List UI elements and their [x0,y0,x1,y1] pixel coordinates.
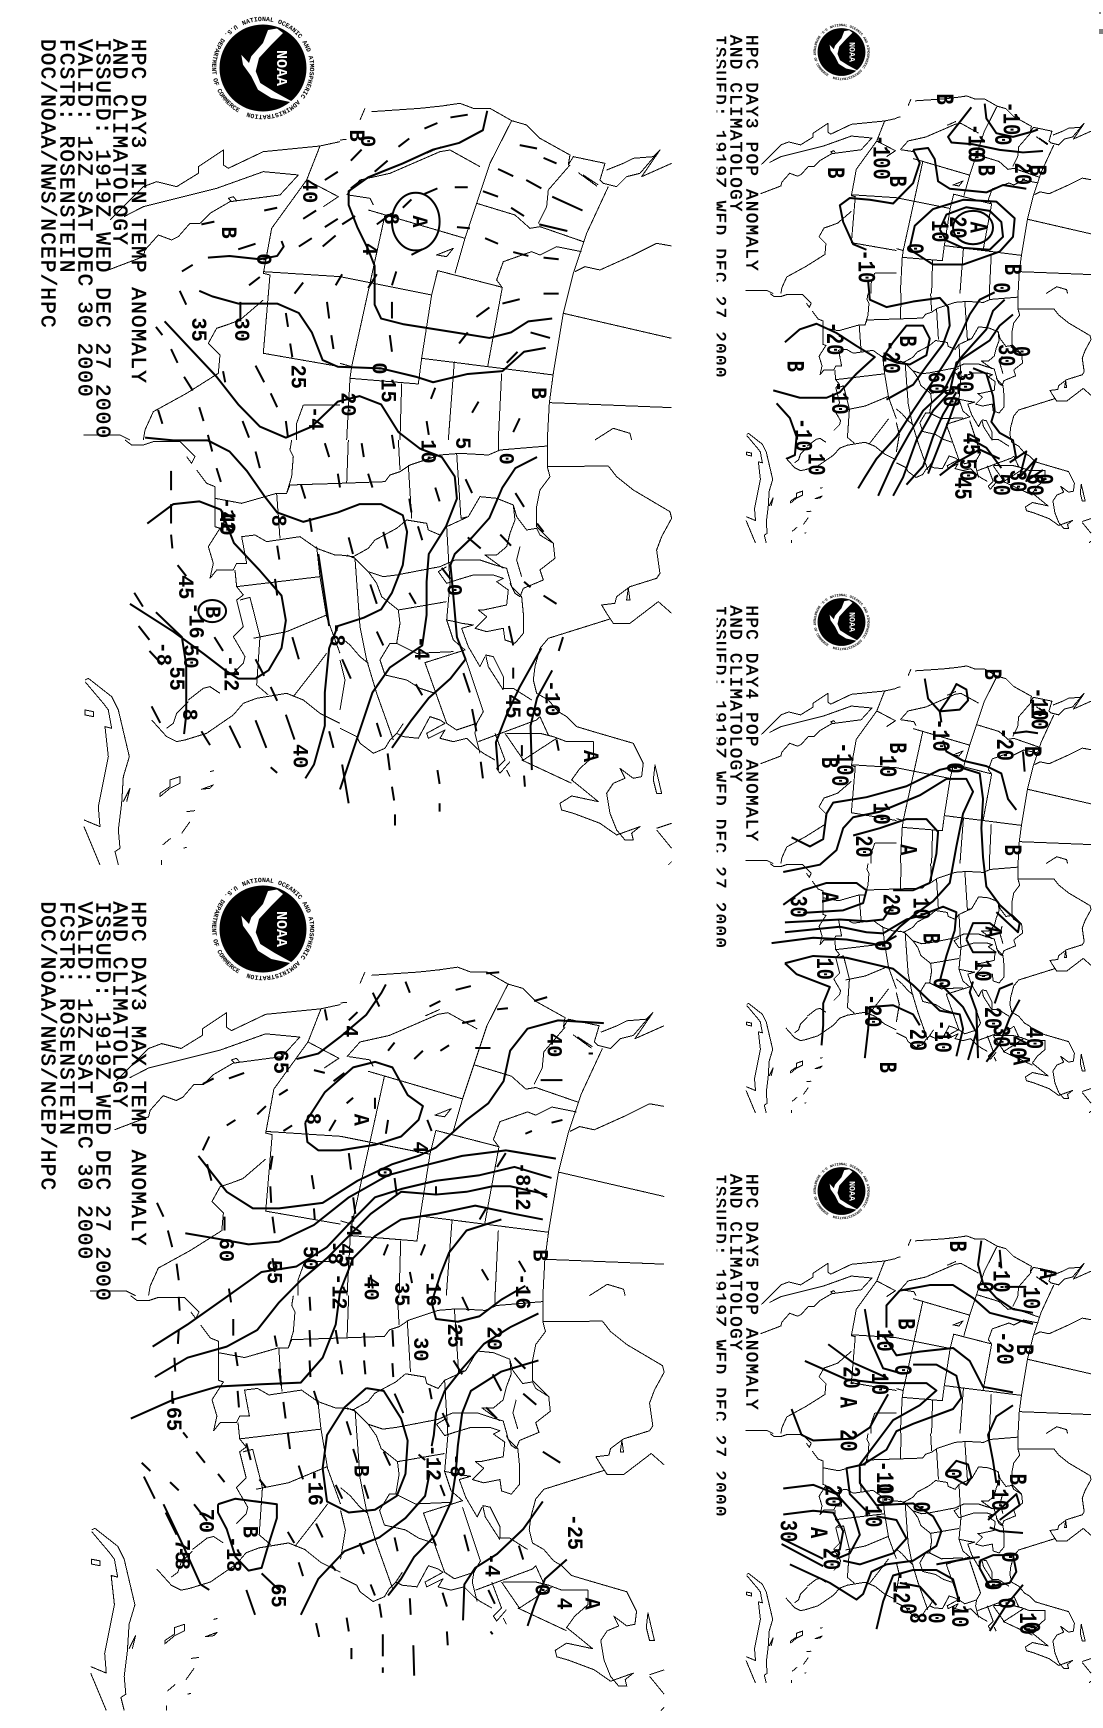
contour value labels: -8 [168,1546,193,1570]
contour value labels: A [347,1114,372,1126]
icon: small NOAA logo: NATIONAL OCEANIC AND ATMOSPHERIC ADMINISTRATION [830,1162,870,1220]
contour value labels: 0 [867,940,896,951]
contour value labels: -20 [989,728,1017,761]
contour value labels: 10 [801,453,829,476]
contour value labels: 20 [816,1548,844,1570]
contour value labels: 0 [370,1166,395,1179]
contour value labels: 0 [994,1551,1022,1563]
contour value labels: 0 [969,1281,997,1293]
contour value labels: 8 [176,709,201,721]
high loop contour [392,193,440,250]
icon: NOAA logo: U.S. DEPARTMENT OF COMMERCE [212,25,240,112]
contour value labels: 75 [168,1539,193,1563]
heading: min temp chart text block: ISSUED: 1919Z WED DEC 27 2000 [90,39,112,439]
contour value labels: 30 [1002,470,1030,492]
contour value labels: 4 [356,243,381,256]
contour value labels: -12 [419,1445,444,1481]
contour value labels: -8 [323,622,348,646]
contour value labels: 20 [832,1429,861,1452]
tick marks top right [1100,12,1102,34]
contour value labels: 45 [172,575,197,599]
contour value labels: -16 [301,1469,326,1506]
icon: NOAA logo: NATIONAL OCEANIC AND ATMOSPHERIC ADMINISTRATION [242,878,314,980]
contour value labels: 10 [869,1483,897,1505]
contour value labels: 8 [265,515,290,527]
contour value labels: 10 [1024,708,1052,730]
contour value labels: 65 [264,1583,289,1608]
contour value labels: 20 [942,216,971,239]
contour value labels: -812 [508,1162,534,1211]
contour value labels: 0 [939,762,967,774]
contour value labels: 20 [876,894,904,916]
contour value labels: 45 [956,433,984,455]
contour value labels: B [1017,746,1046,757]
contour value labels: 0 [365,362,390,374]
contour value labels: 10 [864,1373,892,1395]
contour value labels: -10 [1024,687,1052,721]
contour value labels: B [942,1241,971,1252]
contour value labels: 0 [1016,1622,1044,1633]
contour value labels [780,94,1057,500]
contour value labels: 0 [887,1365,916,1376]
contour value labels: A [1032,1268,1061,1280]
contour value labels: 0 [921,1612,949,1624]
heading: min temp chart text block [35,39,148,439]
chart: contours and labels [130,111,602,825]
contour value labels: B [1002,1474,1030,1485]
dashed contours [142,972,593,1676]
contour value labels: 25 [284,365,309,389]
contour value labels: 20 [848,835,877,858]
chart: contours and labels [131,972,604,1676]
contour value labels: B [929,94,957,105]
contour value labels: -10 [538,680,563,716]
contour value labels: 5 [449,437,474,449]
contour value labels: A [814,892,843,903]
contour value labels: 8 [902,1612,931,1624]
contour value labels: B [882,176,911,187]
solid contours [131,984,604,1626]
contour value labels: 8 [519,706,544,718]
base map [746,1236,1091,1683]
icon: NOAA logo: U.S. DEPARTMENT OF COMMERCE [212,886,240,974]
contour value labels: 0 [824,775,852,786]
contour value labels: 40 [1019,1027,1047,1049]
contour value labels: -20 [857,994,886,1027]
contour value labels: 20 [480,1326,505,1350]
icon: NOAA logo: NOAA [272,50,289,86]
contour value labels: -10 [986,1259,1014,1293]
contour value labels: 60 [212,1238,237,1262]
icon: small NOAA logo: NATIONAL OCEANIC AND ATMOSPHERIC ADMINISTRATION [830,594,870,650]
icon: small NOAA logo: U.S. DEPARTMENT OF COMMERCE [813,28,829,76]
contour value labels: 20 [334,392,359,417]
contour value labels: 0 [991,1598,1019,1609]
contour value labels: 0 [1006,346,1034,357]
contour value labels: B [971,165,999,176]
contour value labels: 10 [924,220,952,242]
heading: min temp chart text block: FCSTR: ROSENSTEIN [54,39,76,274]
heading: min temp chart text block: AND CLIMATOLOGY [107,39,130,246]
contour value labels: -4 [340,1213,365,1237]
icon: small NOAA logo: NOAA [847,612,856,632]
low loop contour [198,600,226,622]
icon: NOAA logo: NOAA [272,911,289,947]
contour value labels: 0 [961,152,989,163]
heading: Day 5 POP text block [716,1174,758,1516]
heading: Day 5 POP text block: AND CLIMATOLOGY [725,1174,745,1352]
base map [83,103,672,865]
contour value labels: 0 [528,1584,553,1596]
contour value labels: -10 [925,718,953,752]
contour value labels: -65 [160,1395,185,1431]
chart: contours and labels [772,1241,1061,1635]
icon: small NOAA logo: U.S. DEPARTMENT OF COMMERCE [813,598,829,646]
contour value labels [772,1241,1061,1635]
solid contours [130,111,552,789]
contour value labels: A [803,1527,831,1539]
contour value labels: 40 [357,1276,382,1301]
heading: Day 4 POP text block [716,605,758,947]
contour value labels: 10 [872,755,901,777]
contour value labels: 0 [926,978,954,989]
contour value labels: -10 [984,1477,1012,1511]
heading: max temp chart text block: DOC/NOAA/NWS/NCEP/HPC [35,902,58,1191]
contour value labels: 8 [377,213,402,225]
base map [746,96,1091,543]
contour value labels: B [814,757,842,768]
icon: small NOAA logo: U.S. DEPARTMENT OF COMMERCE [813,1168,829,1216]
contour value labels: B [997,845,1026,856]
contour value labels: -8 [443,1453,468,1478]
contour value labels: 0 [250,253,275,265]
contour value labels [150,130,602,768]
contour value labels: 4 [406,1141,431,1154]
contour value labels: A [977,926,1006,938]
contour value labels: 50 [177,644,202,669]
heading: min temp chart text block: DOC/NOAA/NWS/NCEP/HPC [35,39,58,329]
heading: Day 4 POP text block: ISSUED: 1919Z WED DEC 27 2000 [709,606,729,949]
contour value labels: -10 [996,102,1024,135]
contour value labels: 0 [440,584,465,596]
dashed contours [134,115,583,825]
contour value labels: 30 [991,344,1019,366]
contour value labels: 35 [185,317,210,342]
solid contours [772,679,1038,1062]
contour value labels: 50 [986,473,1014,496]
solid contours [773,104,1043,496]
contour value labels: 20 [836,1366,864,1389]
contour value labels: -12 [214,497,239,533]
inner high ring [953,211,993,244]
contour value labels: 40 [213,511,238,536]
contour value labels: 0 [1029,474,1057,485]
icon: small NOAA logo: NOAA [847,42,856,62]
heading: max temp chart text block: ISSUED: 1919Z WED DEC 27 2000 [90,902,112,1302]
contour value labels: 4 [550,1598,575,1610]
contour value labels: 60 [921,372,949,394]
contour value labels: 10 [414,439,439,464]
contour value labels: 10 [906,897,934,920]
contour value labels: -10 [869,1461,897,1494]
contour value labels: -8 [150,642,175,666]
contour value labels: 20 [902,1029,931,1051]
contour value labels: 30 [949,370,977,392]
contour value labels: 8 [299,1113,324,1125]
contour value labels: B [1009,1344,1037,1355]
heading: max temp chart text block: HPC DAY3 MAX TEMP ANOMALY [125,902,148,1247]
contour value labels: -12 [886,1570,914,1603]
heading: max temp chart text block: VALID: 12Z SAT DEC 30 2000 [72,902,94,1260]
icon: small NOAA logo [813,1162,870,1220]
solid contours [782,1241,1033,1631]
contour value labels: 0 [937,1468,966,1479]
contour value labels: -20 [876,340,904,374]
icon: NOAA logo: NATIONAL OCEANIC AND ATMOSPHERIC ADMINISTRATION [242,16,314,120]
chart: contours and labels [773,94,1057,500]
contour value labels: -16 [508,1273,534,1310]
contour value labels: -18 [220,1536,245,1572]
contour value labels: 0 [986,282,1014,293]
contour value labels: B [882,742,911,753]
contour value labels: 10 [1016,1287,1044,1309]
contour value labels: 55 [260,1260,285,1284]
contour value labels: 20 [817,1485,846,1507]
contour value labels: 50 [936,385,964,407]
contour value labels: -20 [819,322,847,355]
contour value labels: -12 [217,655,242,691]
heading: Day 3 POP text block: HPC DAY3 POP ANOMALY [741,35,761,272]
panel: Day 4 POP anomaly [716,594,1092,1113]
contour value labels: -4 [302,406,327,431]
contour value labels: 30 [772,1520,801,1542]
heading: max temp chart text block [35,902,148,1302]
contour value labels: A [577,750,602,762]
contour value labels: A [832,1397,861,1409]
contour value labels: 0 [906,1501,934,1513]
contour value labels: B [892,336,921,347]
base map [746,666,1091,1113]
contour value labels: 4 [336,1025,361,1038]
contour value labels: A [892,844,921,856]
chart: contours and labels [772,669,1052,1073]
contour value labels: 0 [899,243,927,254]
icon: small NOAA logo: NATIONAL OCEANIC AND ATMOSPHERIC ADMINISTRATION [830,24,870,80]
contour value labels [160,1025,603,1610]
contour value labels: -16 [419,1270,444,1307]
contour value labels: 45 [947,477,976,500]
contour value labels: -10 [927,1020,956,1053]
contour value labels: B [1022,165,1050,176]
heading: max temp chart text block: FCSTR: ROSENSTEIN [54,902,76,1136]
contour value labels: B [780,361,808,372]
contour value labels: 20 [977,1007,1006,1029]
contour value labels: B [215,226,240,239]
icon: small NOAA logo: NOAA [847,1181,856,1201]
contour value labels: -10 [851,250,879,283]
contour value labels: -12 [325,1273,350,1310]
heading: max temp chart text block: AND CLIMATOLOGY [107,902,130,1109]
contour value labels: 55 [163,667,188,691]
contour value labels: 25 [441,1323,466,1348]
contour value labels: 45 [499,694,524,718]
panel: Day 5 POP anomaly [716,1162,1092,1683]
contour value labels: 20 [1007,163,1035,185]
contour value labels: B [916,933,944,944]
contour value labels: 35 [388,1282,413,1306]
contour value labels: 40 [1002,1036,1031,1058]
contour value labels: 50 [296,1246,321,1270]
heading: Day 3 POP text block: AND CLIMATOLOGY [725,35,745,213]
contour value labels: 0 [892,1603,921,1614]
heading: Day 5 POP text block: HPC DAY5 POP ANOMALY [741,1174,761,1411]
contour value labels: -20 [989,1331,1017,1365]
contour value labels: B [343,130,368,142]
contour value labels: 10 [967,959,996,982]
contour value labels: B [997,264,1025,275]
contour value labels: -8 [321,1241,346,1265]
contour value labels: A [1006,1054,1034,1066]
contour value labels: -16 [182,602,207,639]
icon: small NOAA logo [813,24,870,80]
heading: Day 3 POP text block [716,34,758,376]
contour value labels: 30 [782,896,811,918]
contour value labels: -4 [478,1553,503,1577]
contour value labels: B [526,1249,551,1262]
contour value labels: 45 [332,1243,357,1268]
contour value labels: 10 [809,958,837,980]
contour value labels: 50 [952,459,981,481]
contour value labels: -10 [829,742,857,776]
contour value labels: -10 [824,381,852,415]
contour value labels: 30 [228,317,253,342]
contour value labels: 40 [540,1033,565,1057]
heading: min temp chart text block: VALID: 12Z SAT DEC 30 2000 [72,39,94,398]
heading: Day 5 POP text block: ISSUED: 1919Z WED DEC 27 2000 [709,1174,729,1518]
contour value labels: B [820,167,848,178]
contour value labels: B [236,1526,261,1538]
contour value labels: B [872,1062,901,1073]
contour value labels: B [977,669,1006,680]
contour value labels: B [891,1318,919,1330]
contour value labels: 60 [1019,473,1047,496]
contour value labels: 0 [977,1579,1005,1590]
contour value labels: 70 [192,1509,217,1533]
heading: Day 3 POP text block: ISSUED: 1919Z WED DEC 27 2000 [709,35,729,379]
contour value labels: 10 [869,1329,897,1352]
contour value labels: A [962,222,991,233]
panel: Day 3 max temp anomaly [35,878,664,1711]
contour value labels: -100 [866,135,894,180]
contour value labels: B [347,1465,372,1477]
contour value labels: A [578,1598,603,1610]
contour value labels: -10 [944,1594,972,1628]
contour value labels: 0 [492,453,517,465]
contour value labels: 40 [296,179,321,203]
contour value labels: A [406,215,431,228]
heading: Day 4 POP text block: AND CLIMATOLOGY [725,606,745,783]
contour value labels: -25 [561,1514,586,1550]
heading: min temp chart text block: HPC DAY3 MIN TEMP ANOMALY [125,39,148,384]
contour value labels: 0 [353,135,378,147]
contour value labels [782,669,1052,1073]
contour value labels: 10 [866,803,894,825]
contour value labels: 65 [267,1050,292,1074]
contour value labels: -4 [408,636,433,660]
contour value labels: 40 [286,744,311,768]
contour value labels: 30 [407,1337,432,1362]
contour value labels: 10 [857,1505,886,1528]
contour value labels: 0 [987,134,1015,145]
heading: Day 4 POP text block: HPC DAY4 POP ANOMALY [741,606,761,843]
base map [90,967,664,1710]
icon: small NOAA logo [813,594,870,650]
panel: Day 3 min temp anomaly [35,16,672,865]
contour value labels: B [525,387,550,400]
contour value labels: -10 [787,418,816,452]
contour value labels: 30 [985,1025,1014,1047]
contour value labels: -10 [961,124,989,157]
contour value labels: B [199,606,223,618]
contour value labels: 15 [374,378,399,403]
contour value labels: 10 [1012,1612,1040,1635]
panel: Day 3 POP anomaly [716,24,1092,543]
